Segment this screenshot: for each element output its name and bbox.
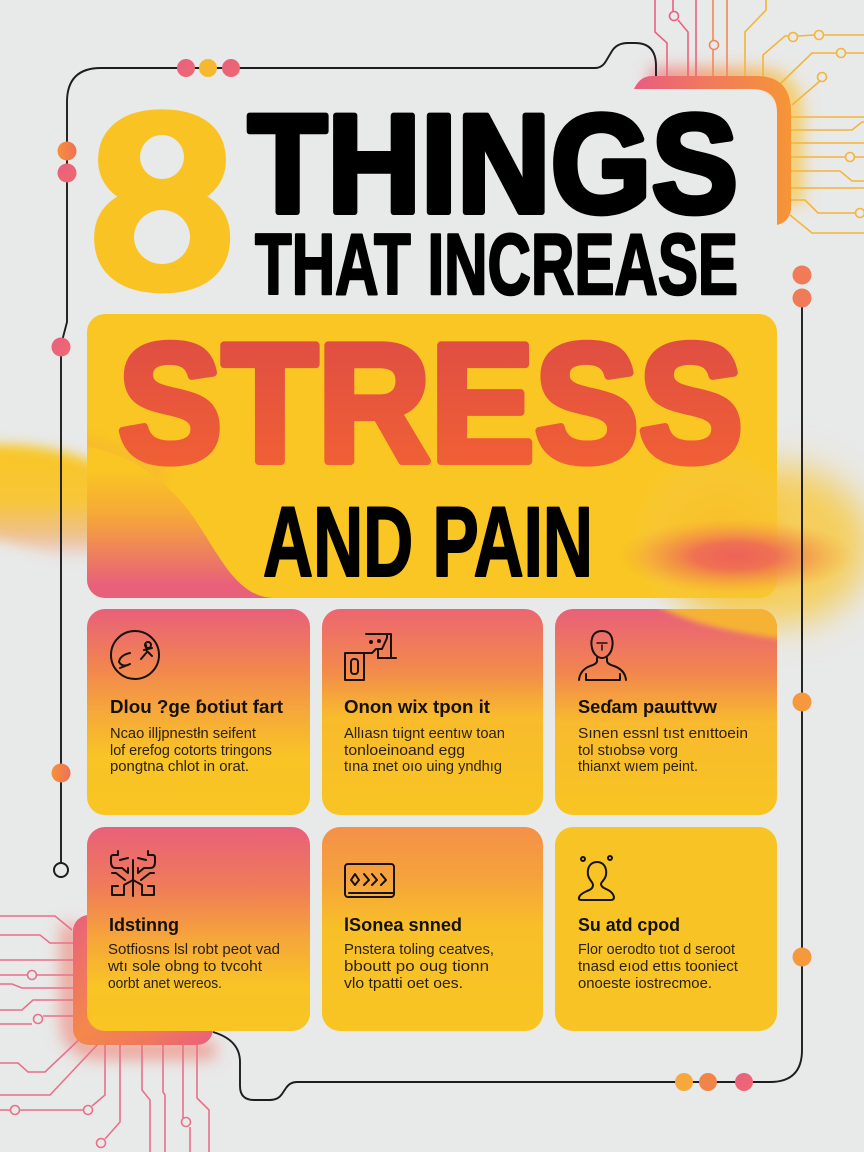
icon: person with nodes (579, 856, 614, 900)
card 3 (555, 609, 777, 815)
card 1 heading: Dlou ?ge ɓotiut fart (110, 697, 283, 717)
card 2 heading: Onon wix tpon it (344, 697, 490, 717)
card 5 body: bboutt po oug tionn (344, 959, 489, 975)
card 6 (555, 827, 777, 1031)
wave: pink lower left (87, 450, 274, 598)
panel: stress hero (60, 314, 777, 610)
glow mask: clean interior of the top right corner (610, 89, 777, 299)
icon: device and tap (345, 634, 396, 680)
card 2 body: Allıasn tıignt eentıw toan (344, 726, 505, 742)
heading: AND PAIN: AND PAIN (263, 486, 593, 597)
glow: left yellow swoosh (0, 444, 170, 565)
card 3 body: Sınen essnl tıst enıttoein (578, 726, 748, 742)
card 6 body: onoeste iostrecmoe. (578, 976, 712, 992)
card 1 body: lof erefog cotorts tringons (110, 743, 272, 759)
card 3 body: thianxt wıem peint. (578, 759, 698, 775)
card 4 body: Sotfiosns lsl robt peot vad (108, 942, 280, 958)
big number 8: 8 (94, 67, 230, 335)
card 4 (87, 827, 310, 1031)
corner bar: top right (634, 76, 791, 225)
card 5 body: vlo tpatti oet oes. (344, 976, 463, 992)
card 5 heading: lSonea snned (344, 915, 462, 935)
icon: code screen (345, 864, 394, 897)
glow: right blurred blob background (680, 465, 864, 625)
card 6 body: tnasd eıod ettıs tooniect (578, 959, 738, 975)
card 6 body: Flor oerodto tıot d seroot (578, 942, 735, 958)
card 4 body: oorbt anet wereos. (108, 976, 222, 992)
frame node dots (52, 59, 812, 1091)
card 4 heading: Idstinng (109, 915, 179, 935)
frame line (61, 43, 802, 1100)
card 3 body: tol stıobsə vorg (578, 743, 678, 759)
card 2 body: tına ɪnet oıo uing yndhıg (344, 759, 502, 775)
card 2 body: tonloeinoand egg (344, 743, 465, 759)
circuit traces: bottom left (0, 916, 209, 1152)
card 1 body: Ncao illjpnestłn seifent (110, 726, 256, 742)
card 4 body: wtı sole obng to tvcoht (107, 959, 262, 975)
card 6 heading: Su atd cpod (578, 915, 680, 935)
corner bar: bottom left (73, 915, 213, 1045)
card 2 (322, 609, 543, 815)
card 5 (322, 827, 543, 1031)
card 5 body: Pnstera toling ceatves, (344, 942, 494, 958)
glow: top right corner (650, 78, 793, 205)
card 3 heading: Seɗam paɯttvw (578, 697, 718, 717)
heading: STRESS: STRESS (118, 309, 743, 497)
icon: brain circuit (111, 851, 155, 896)
card 1 body: pongtna chlot in orat. (110, 759, 249, 775)
blob: right yellow and red smear (631, 460, 842, 642)
glow: bottom left corner (70, 925, 215, 1050)
icon: person head (579, 631, 626, 680)
card 1 (87, 609, 310, 815)
circuit traces: top right (655, 0, 864, 233)
icon: circle figure (111, 631, 159, 679)
title: THINGS: THINGS (248, 85, 738, 242)
